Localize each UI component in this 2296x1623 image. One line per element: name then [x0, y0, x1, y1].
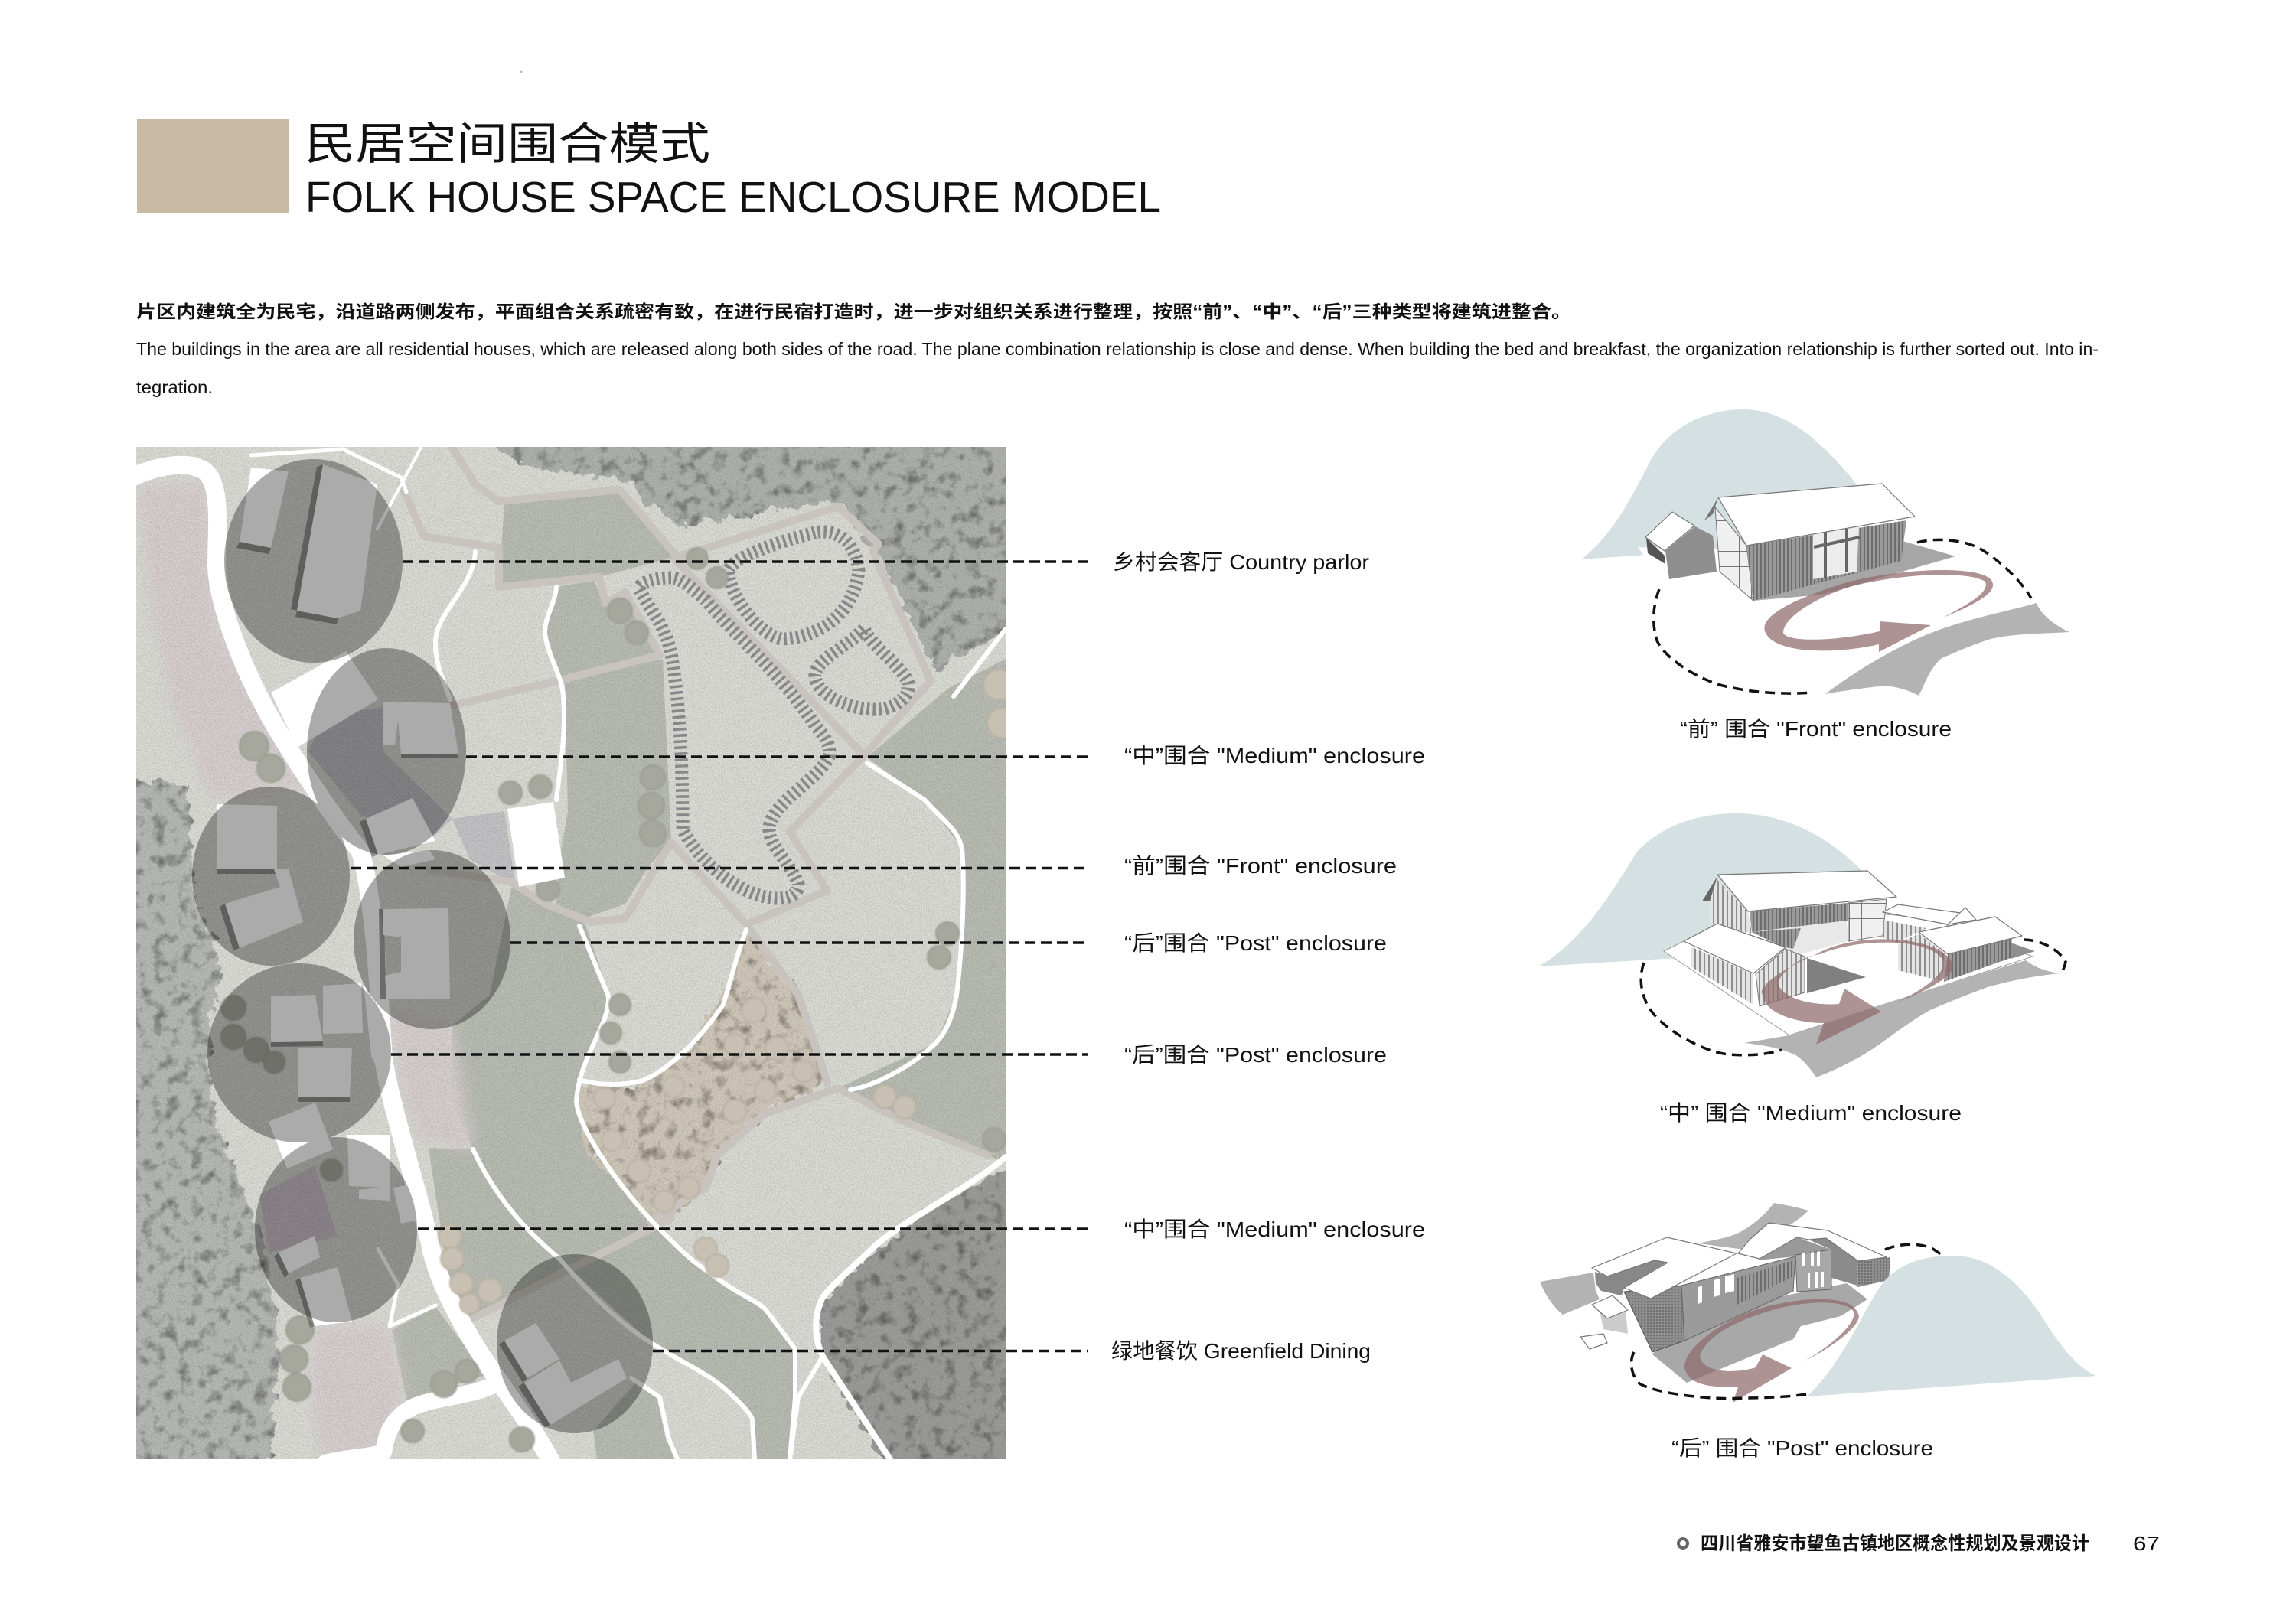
dashed boundary right — [2024, 940, 2066, 973]
page number: 67 — [2133, 1532, 2160, 1555]
label country parlor: 乡村会客厅 Country parlor — [1113, 550, 1369, 574]
label front enclosure: “前”围合 "Front" enclosure — [1124, 854, 1397, 878]
back road left — [1540, 1273, 1600, 1315]
forest top — [496, 447, 1006, 672]
ground shadow — [1753, 541, 1955, 601]
description english line 1: The buildings in the area are all residential houses, which are released along both sides of the road. The plane combination relationship is close and dense. When building the bed and breakfast, the organization relationship is further sorted out. Into in- — [136, 339, 2099, 359]
label medium enclosure second: “中”围合 "Medium" enclosure — [1124, 1217, 1425, 1241]
description chinese: 片区内建筑全为民宅，沿道路两侧发布，平面组合关系疏密有致，在进行民宿打造时，进一步对组织关系进行整理，按照“前”、“中”、“后”三种类型将建筑进整合。 — [136, 301, 1571, 321]
enclosure arrow — [1764, 570, 1993, 652]
white roads — [130, 448, 1006, 1465]
dashed boundary right — [1885, 1244, 1944, 1256]
label post enclosure: “后”围合 "Post" enclosure — [1124, 931, 1387, 955]
road — [1744, 960, 2060, 1077]
description english line 2: tegration. — [136, 377, 213, 397]
dashed boundary — [1641, 963, 1782, 1055]
road swoosh — [1825, 603, 2069, 696]
footer ring icon — [1678, 1539, 1688, 1548]
map base ground — [136, 447, 1006, 1459]
footer project title: 四川省雅安市望鱼古镇地区概念性规划及景观设计 — [1701, 1533, 2089, 1554]
dashed boundary — [1654, 589, 1813, 693]
paving — [259, 707, 516, 1253]
dashed boundary — [1631, 1352, 1807, 1399]
long house — [1580, 1223, 1890, 1352]
forest left — [136, 777, 281, 1459]
map labels — [1111, 550, 1425, 1363]
hill — [1581, 409, 1860, 559]
description text — [136, 301, 2099, 397]
hill — [1807, 1256, 2096, 1396]
tan trees — [439, 670, 1018, 1314]
forest lower right — [819, 1171, 1006, 1459]
label greenfield dining: 绿地餐饮 Greenfield Dining — [1111, 1339, 1371, 1363]
enclosure highlight ellipses — [192, 459, 653, 1433]
diagram: front enclosure — [1581, 409, 2069, 741]
landscape trees — [221, 548, 1006, 1452]
title english: FOLK HOUSE SPACE ENCLOSURE MODEL — [305, 173, 1161, 222]
ground shadow — [1652, 1283, 1867, 1383]
diagram: post enclosure — [1540, 1203, 2096, 1460]
tan tree patch — [576, 930, 827, 1221]
white buildings — [217, 464, 627, 1425]
dashed boundary right — [1917, 539, 2031, 598]
leader lines — [351, 562, 1088, 1351]
grass parcels — [392, 490, 1006, 1459]
house footprints with shadows — [217, 464, 627, 1428]
title colour square — [137, 119, 289, 213]
footer — [1678, 1532, 2160, 1555]
title chinese: 民居空间围合模式 — [305, 119, 710, 169]
caption post: “后” 围合 "Post" enclosure — [1671, 1436, 1933, 1460]
white plot — [1638, 547, 1952, 641]
white platform — [1664, 903, 2033, 1035]
railway tracks — [639, 532, 908, 898]
label post enclosure second: “后”围合 "Post" enclosure — [1124, 1043, 1387, 1067]
footpaths — [401, 448, 988, 1320]
pink planting strips — [137, 481, 473, 1458]
enclosure arrow — [1684, 1299, 1859, 1403]
header block — [137, 119, 1161, 222]
ground texture — [136, 447, 1006, 1459]
house — [1645, 484, 1915, 601]
site plan map — [122, 436, 1026, 1477]
caption medium: “中” 围合 "Medium" enclosure — [1660, 1101, 1962, 1125]
diagram: medium enclosure — [1538, 813, 2066, 1125]
hill — [1538, 813, 1862, 966]
courtyard houses — [1684, 871, 2035, 1006]
label medium enclosure: “中”围合 "Medium" enclosure — [1124, 744, 1425, 768]
building shadows — [217, 464, 550, 1428]
enclosure arrow — [1762, 939, 1953, 1045]
caption front: “前” 围合 "Front" enclosure — [1680, 717, 1952, 741]
back road right — [1698, 1203, 1808, 1250]
